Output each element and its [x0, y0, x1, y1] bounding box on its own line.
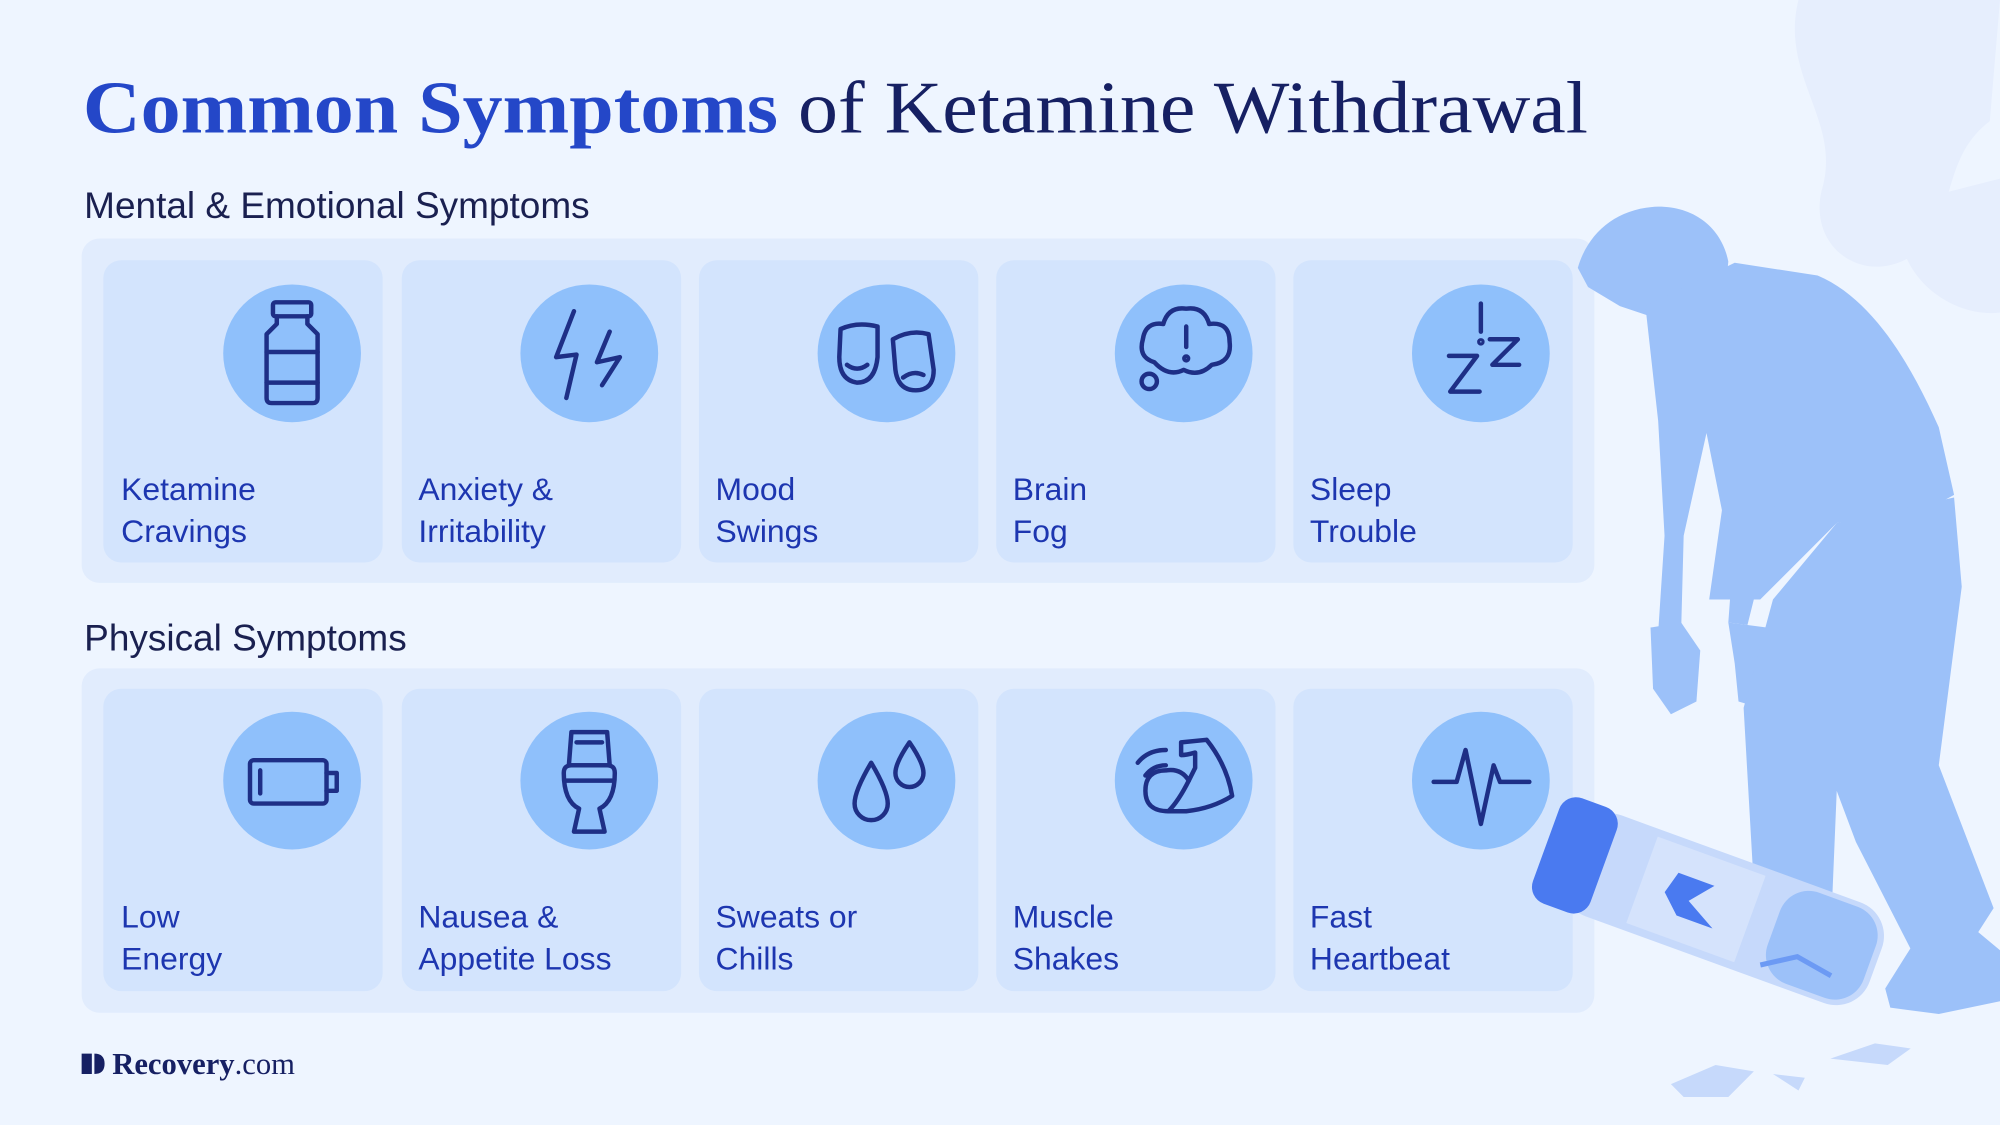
card: Sleep Trouble: Trouble	[1310, 513, 1417, 549]
card: Brain Fog: Brain	[1013, 471, 1087, 507]
title: Common Symptoms of Ketamine Withdrawal	[83, 68, 1588, 150]
card: Anxiety	[402, 260, 681, 562]
card: Ketamine Cravings: Cravings	[121, 513, 247, 549]
heading: physical: Physical Symptoms	[84, 618, 407, 659]
card: Sleep Trouble: Sleep	[1310, 471, 1391, 507]
card: Nausea	[402, 689, 681, 991]
card: Sleep Trouble	[1293, 260, 1573, 562]
card: Sweats	[699, 689, 978, 991]
heading: mental: Mental & Emotional Symptoms	[84, 185, 590, 226]
card: Mood Swings	[699, 260, 978, 562]
card: Brain Fog: Fog	[1013, 513, 1068, 549]
card: Brain Fog	[996, 260, 1276, 562]
illustration: glass shards	[1671, 1043, 1911, 1097]
card: Anxiety: Anxiety &	[418, 471, 553, 507]
illustration: broken bottle	[1527, 792, 1895, 1018]
card: Fast Heartbeat: Heartbeat	[1310, 940, 1450, 976]
card: Fast Heartbeat: Fast	[1310, 898, 1372, 934]
card: Mood Swings: Mood	[716, 471, 795, 507]
card: Fast Heartbeat	[1293, 689, 1573, 991]
logo: Recovery.com	[112, 1047, 295, 1081]
card: Anxiety: Irritability	[418, 513, 546, 549]
card: Muscle Shakes: Muscle	[1013, 898, 1114, 934]
panel: physical	[82, 668, 1594, 1013]
card: Sweats: Chills	[716, 940, 793, 976]
card: Nausea: Appetite Loss	[418, 940, 612, 976]
card: Mood Swings: Swings	[716, 513, 818, 549]
background smoke	[1795, 0, 2000, 313]
card: Low Energy: Energy	[121, 940, 222, 976]
card: Muscle Shakes	[996, 689, 1276, 991]
card: Low Energy	[103, 689, 383, 991]
card: Muscle Shakes: Shakes	[1013, 940, 1119, 976]
illustration: person	[1578, 207, 2000, 1014]
card: Low Energy: Low	[121, 898, 181, 934]
card: Ketamine Cravings: Ketamine	[121, 471, 256, 507]
card: Sweats: Sweats or	[716, 898, 858, 934]
panel: mental	[82, 239, 1594, 583]
card: Nausea: Nausea &	[418, 898, 558, 934]
card: Ketamine Cravings	[103, 260, 383, 562]
